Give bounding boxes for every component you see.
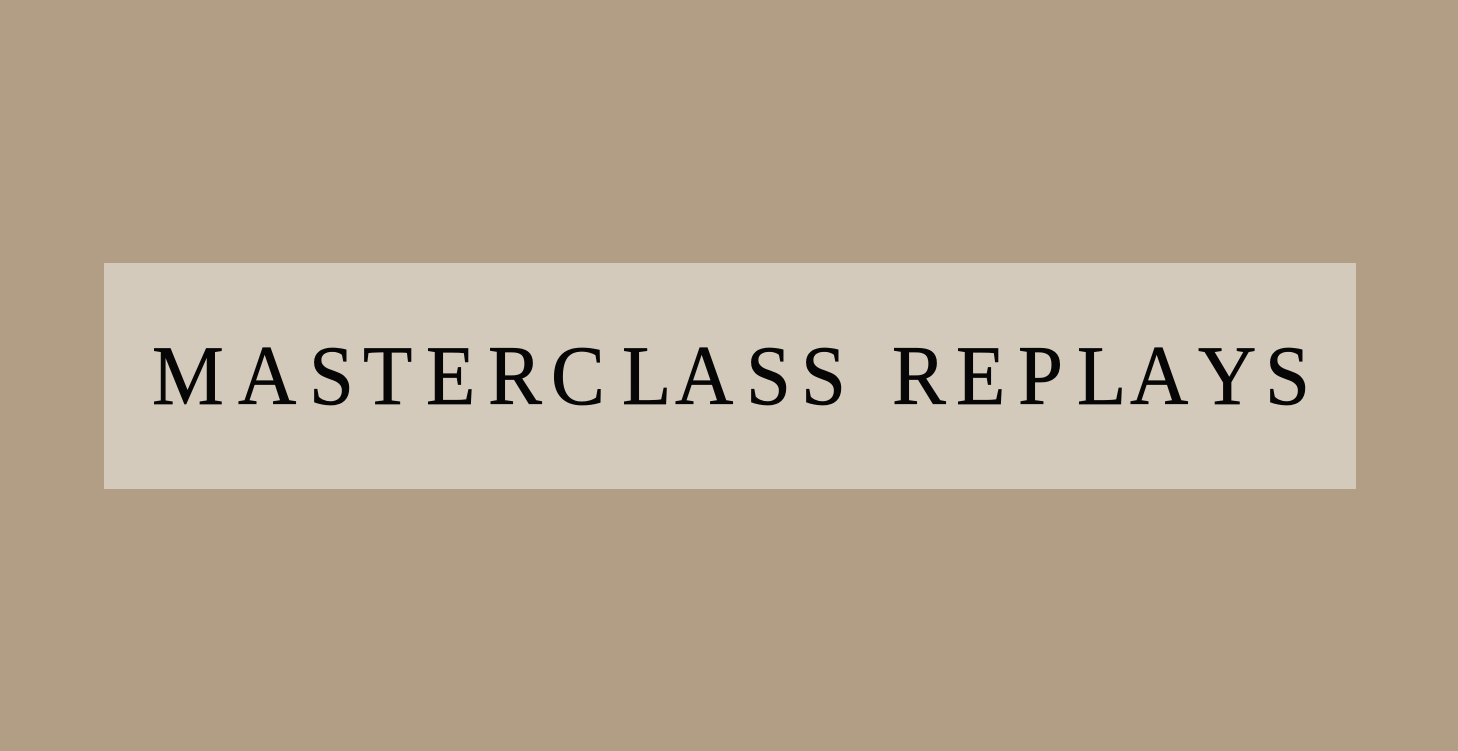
panel: title banner [104, 263, 1356, 489]
